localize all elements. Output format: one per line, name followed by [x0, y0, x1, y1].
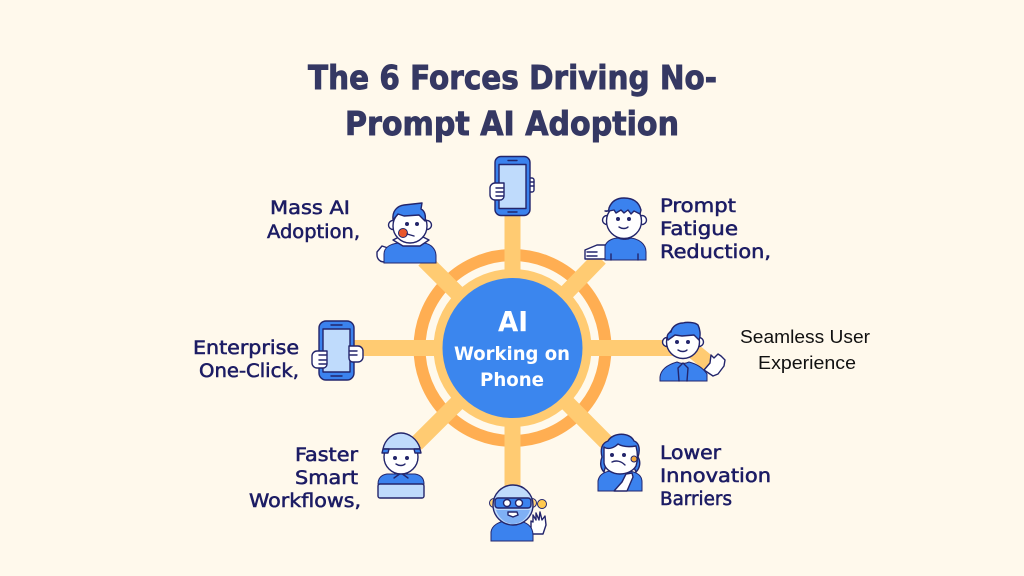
label: faster smart workflows [249, 445, 361, 512]
label: faster smart workflows: Faster [295, 445, 358, 466]
label: prompt fatigue reduction: Reduction, [660, 242, 771, 263]
center hub label [454, 305, 570, 391]
icon: person faster workflows [378, 433, 424, 498]
label: lower innovation barriers: Lower [660, 443, 721, 464]
center hub label: Phone [480, 369, 544, 391]
label: faster smart workflows: Smart [295, 468, 358, 489]
label: mass AI adoption: Mass AI [270, 198, 350, 219]
label: seamless user experience: Seamless User [740, 327, 870, 347]
icon: person seamless experience [660, 322, 725, 381]
label: mass AI adoption [267, 198, 360, 243]
label: lower innovation barriers: Innovation [660, 466, 771, 487]
label: enterprise one-click [193, 338, 299, 382]
label: enterprise one-click: One-Click, [199, 361, 299, 382]
icon: person mass AI adoption [377, 203, 436, 263]
icon: phone top [490, 156, 534, 216]
label: seamless user experience [740, 327, 870, 373]
outer orange ring [420, 255, 606, 441]
label: prompt fatigue reduction: Prompt [660, 196, 736, 217]
spokes [350, 212, 712, 492]
label: mass AI adoption: Adoption, [267, 222, 360, 243]
title: Prompt AI Adoption [345, 104, 679, 143]
label: lower innovation barriers: Barriers [660, 489, 732, 510]
icon: person prompt fatigue [585, 198, 646, 260]
label: enterprise one-click: Enterprise [193, 338, 299, 359]
icon: person lower barriers [598, 434, 642, 491]
label: prompt fatigue reduction: Fatigue [660, 219, 738, 240]
label: prompt fatigue reduction [660, 196, 771, 263]
inner ring [438, 274, 587, 422]
title: The 6 Forces Driving No- [308, 58, 717, 97]
label: lower innovation barriers [660, 443, 771, 510]
label: seamless user experience: Experience [758, 353, 856, 373]
label: faster smart workflows: Workflows, [249, 491, 361, 512]
icon: person bottom goggles [490, 485, 546, 541]
center hub label: AI [498, 305, 528, 338]
center hub label: Working on [454, 343, 570, 365]
icon: phone left [312, 321, 363, 380]
title [308, 58, 717, 143]
